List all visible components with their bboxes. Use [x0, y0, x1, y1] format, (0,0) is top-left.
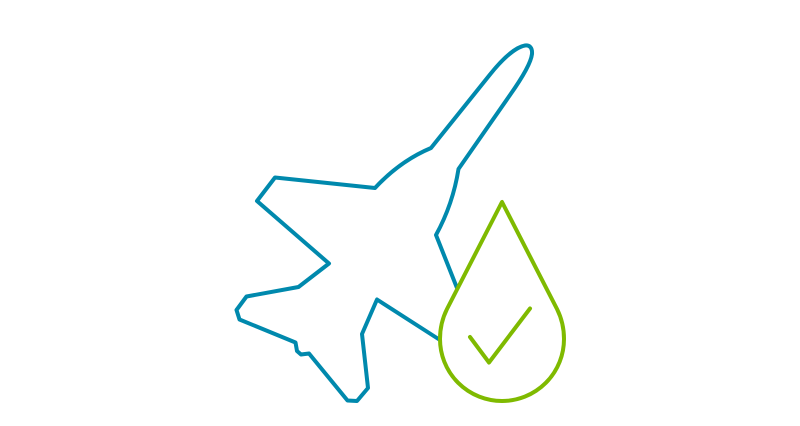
icon: check mark: [470, 308, 530, 362]
icon: aircraft outline: [236, 45, 532, 401]
icon: water drop: [440, 202, 564, 401]
